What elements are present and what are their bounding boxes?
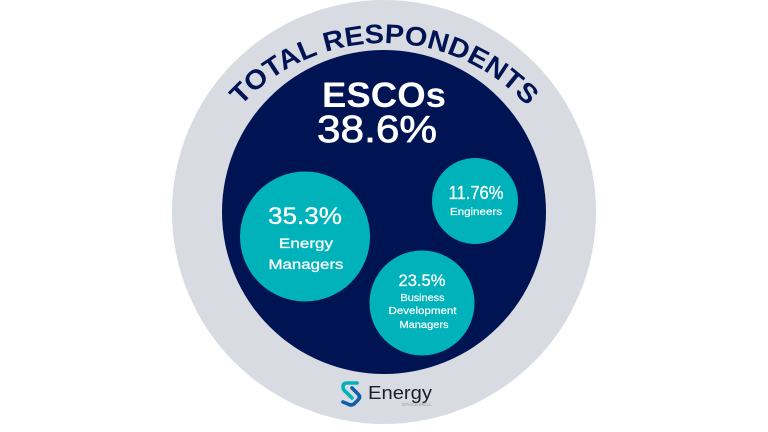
- bubble: business development managers: Business: [400, 293, 444, 304]
- bubble: business development managers: Development: [388, 306, 457, 317]
- bubble: business development managers: Managers: [400, 320, 448, 331]
- heading: ESCOs share: 38.6%: [317, 109, 437, 151]
- navy inner circle panel: [222, 50, 546, 374]
- logo: Energy Spacewell: [343, 383, 433, 407]
- bubble: engineers: [432, 158, 518, 244]
- bubble: energy managers: 35.3%: [268, 203, 342, 230]
- logo: Energy Spacewell: SPACEWELL: [402, 402, 433, 407]
- bubble: energy managers: Managers: [268, 256, 344, 272]
- curved title: total respondents: TOTAL RESPONDENTS: [228, 24, 538, 104]
- bubble: engineers: Engineers: [450, 206, 502, 218]
- icon: logo mark: [343, 383, 360, 405]
- bubble: business development managers: 23.5%: [398, 271, 446, 290]
- bubble: business development managers: [370, 250, 474, 356]
- outer grey circle panel: [172, 0, 596, 424]
- bubble: energy managers: Energy: [279, 235, 333, 251]
- heading: ESCOs share: [317, 76, 446, 151]
- heading: ESCOs share: ESCOs: [322, 76, 446, 115]
- logo: Energy Spacewell: Energy: [368, 383, 432, 403]
- bubble: energy managers: [240, 172, 370, 302]
- bubble: engineers: 11.76%: [448, 183, 504, 203]
